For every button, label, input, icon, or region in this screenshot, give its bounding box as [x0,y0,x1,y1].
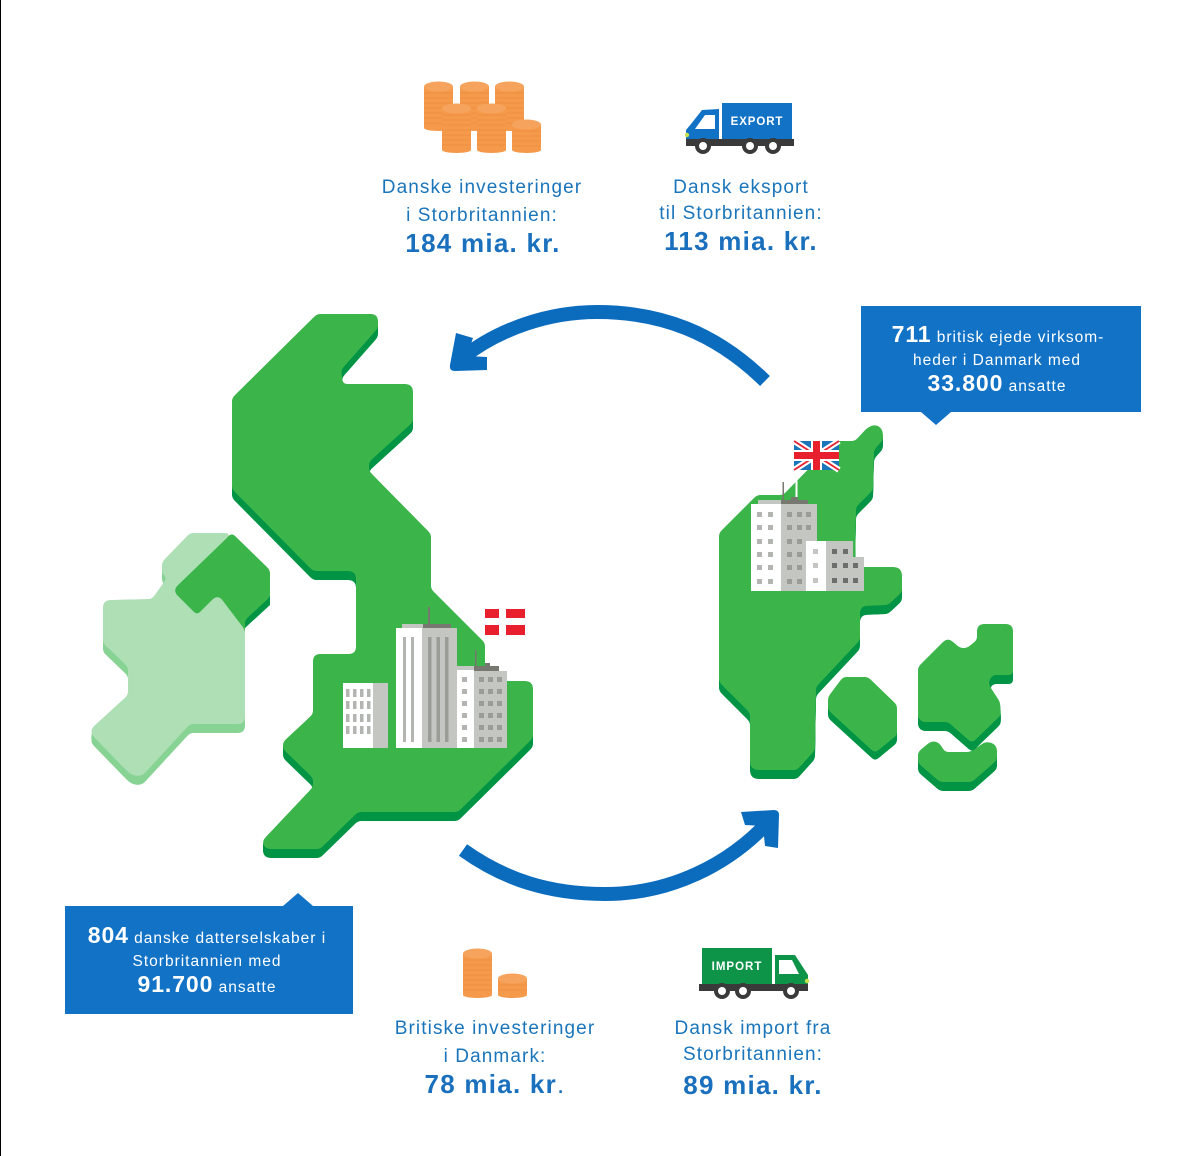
map: Zealand [918,624,1013,752]
callout: Danish subsidiaries in UK: 91.700 ansatte [138,971,276,997]
map: Ireland [91,533,270,785]
map: Jutland [719,425,902,779]
callout: British companies in Denmark [861,306,1141,425]
icon: UK city buildings [343,607,507,748]
map: Northern Ireland [170,533,270,640]
building: tall block [751,482,817,591]
text: Danish investments: 184 mia. kr. [405,228,561,258]
text: Danish import: Storbritannien: [683,1044,823,1065]
text: Danish export [659,177,823,256]
text: Danish export: til Storbritannien: [659,203,823,224]
arrow: top, Denmark to UK [450,312,765,381]
text: British investments: i Danmark: [444,1046,546,1067]
map: Ireland side wall [91,537,245,785]
map: Funen [828,677,897,761]
text: Danish export: Dansk eksport [673,177,809,198]
building: low block [806,541,864,591]
page edge line [0,0,1,1156]
callout: British companies in Denmark: 33.800 ansatte [928,370,1066,396]
icon: import truck: IMPORT [712,961,762,973]
text: Danish import: Dansk import fra [675,1018,831,1039]
icon: export truck [685,103,794,154]
callout: Danish subsidiaries in UK: Storbritannien med [133,953,281,970]
building: tall tower [396,607,457,748]
text: Danish investments: Danske investeringer [382,177,582,198]
icon: coin stacks (Danish investments) [424,82,541,153]
callout: Danish subsidiaries in UK [65,893,353,1014]
icon: export truck: EXPORT [731,116,783,128]
flag: United Kingdom [794,441,839,498]
icon: Danish city buildings [751,482,864,591]
arrow: bottom, UK to Denmark [463,810,779,894]
text: British investments: 78 mia. kr. [425,1069,565,1099]
building: mid-rise [457,650,507,748]
icon: coin stacks (British investments) [463,948,527,998]
icon: import truck [699,948,809,999]
callout: British companies in Denmark: 711 britisk ejede virksom- [892,321,1104,347]
map: Denmark [719,425,1013,791]
text: Danish investments: i Storbritannien: [406,205,558,226]
map: Lolland [918,741,997,791]
text: Danish import: 89 mia. kr. [683,1070,823,1100]
text: Danish investments [382,177,582,258]
text: Danish import [675,1018,831,1100]
flag: Denmark [485,609,525,666]
callout: Danish subsidiaries in UK: 804 danske datterselskaber i [88,922,326,948]
text: British investments [395,1018,595,1099]
text: Danish export: 113 mia. kr. [664,226,818,256]
text: British investments: Britiske investeringer [395,1018,595,1039]
callout: British companies in Denmark: heder i Danmark med [913,352,1081,369]
map: Republic of Ireland, pale [91,533,245,776]
building: small office [343,683,388,748]
map: United Kingdom [232,314,533,858]
